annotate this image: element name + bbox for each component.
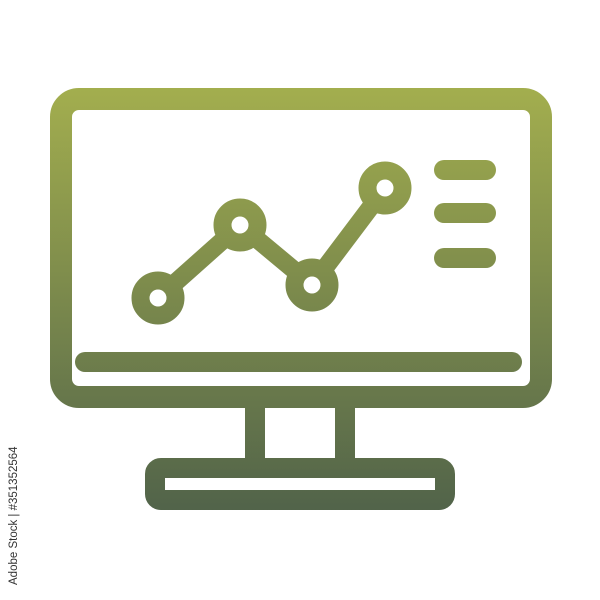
monitor frame — [61, 99, 541, 397]
chart points — [140, 170, 402, 316]
watermark text: Adobe Stock | #351352564 — [8, 446, 20, 585]
stand base — [155, 468, 445, 500]
stand neck — [255, 408, 345, 460]
chart line — [158, 188, 385, 298]
screen baseline bar — [85, 352, 512, 372]
legend lines — [444, 170, 486, 258]
icon: monitor with line chart — [61, 99, 541, 500]
